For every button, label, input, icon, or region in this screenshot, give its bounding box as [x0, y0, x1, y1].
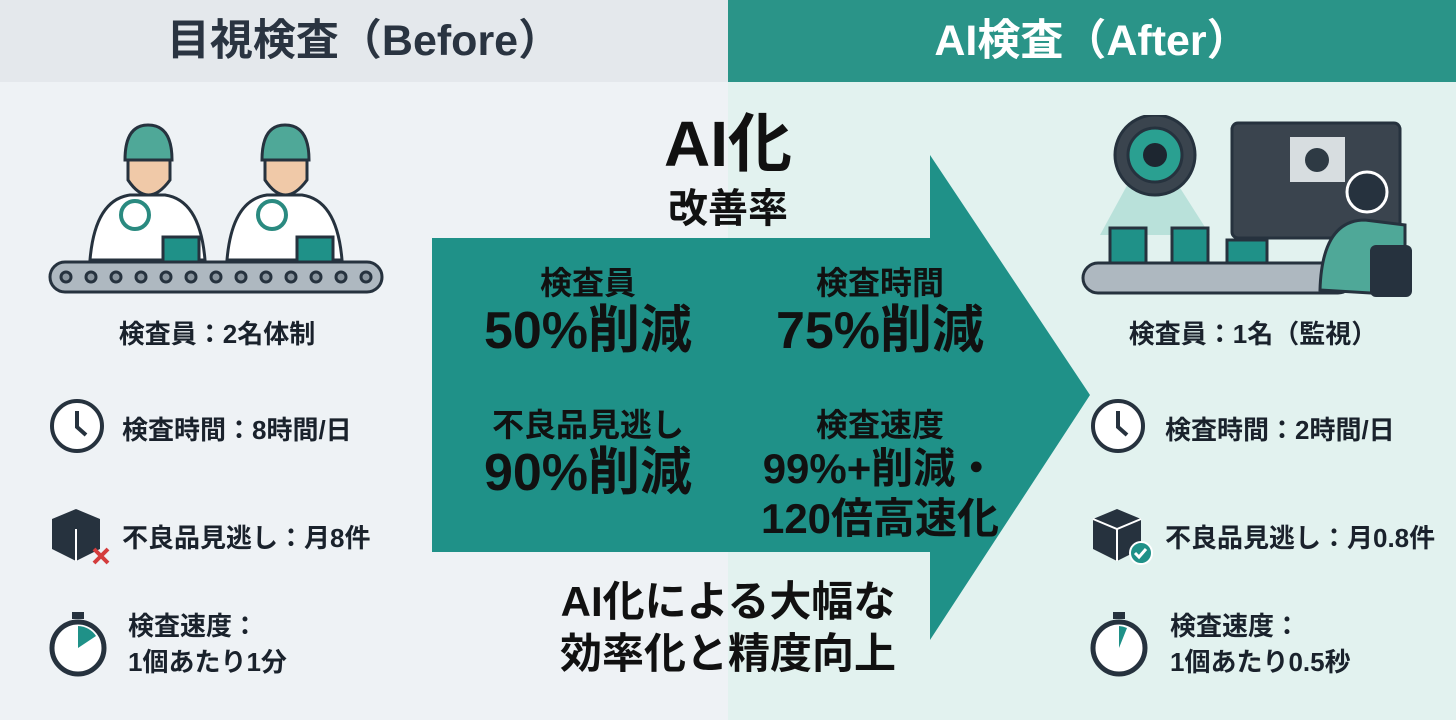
metric: 検査速度: 99%+削減・ — [763, 445, 997, 492]
metric: 検査速度: 120倍高速化 — [761, 495, 999, 542]
conclusion text: AI化による大幅な — [561, 578, 895, 625]
text: 検査速度 before: 検査速度： — [128, 611, 258, 641]
header: after — [728, 0, 1456, 82]
icon: clock left — [50, 399, 104, 453]
illustration: AI camera + monitor — [1082, 115, 1412, 297]
text: 不良品 after: 不良品見逃し：月0.8件 — [1165, 523, 1435, 553]
metric: 検査速度 — [761, 407, 999, 542]
conclusion text: 効率化と精度向上 — [560, 630, 896, 677]
metric: 不良品見逃し: 不良品見逃し — [492, 407, 684, 443]
label: 検査員 1名: 検査員：1名（監視） — [1129, 319, 1377, 349]
metric: 不良品見逃し: 90%削減 — [484, 444, 692, 502]
icon: clock right — [1091, 399, 1145, 453]
metric: 検査時間: 検査時間 — [816, 265, 944, 301]
header: after: AI検査（After） — [934, 17, 1250, 65]
header: before: 目視検査（Before） — [167, 17, 561, 65]
icon: stopwatch left — [50, 612, 106, 676]
text: 検査時間 after: 検査時間：2時間/日 — [1165, 415, 1395, 445]
metric: 検査員 — [484, 265, 692, 360]
text: 検査速度 before: 1個あたり1分 — [128, 647, 287, 677]
icon: stopwatch right — [1090, 612, 1148, 676]
background: left — [0, 82, 728, 720]
label: 検査員 2名: 検査員：2名体制 — [119, 319, 315, 349]
text: 検査速度 after: 検査速度： — [1170, 611, 1300, 641]
illustration: two inspectors on conveyor — [48, 124, 384, 294]
metric: 検査員: 50%削減 — [484, 302, 692, 360]
title: AI化: AI化 — [664, 108, 792, 180]
icon: box check — [1092, 509, 1153, 565]
background: right — [728, 82, 1456, 720]
text: 検査速度 after — [1170, 611, 1351, 677]
text: 検査時間 before: 検査時間：8時間/日 — [122, 415, 352, 445]
text: 検査速度 before — [128, 611, 287, 677]
icon: broken box — [52, 509, 110, 564]
subtitle: 改善率: 改善率 — [668, 187, 788, 231]
metric: 検査員: 検査員 — [540, 265, 636, 301]
metric: 不良品見逃し — [484, 407, 692, 502]
metric: 検査時間: 75%削減 — [776, 302, 984, 360]
text: 不良品 before: 不良品見逃し：月8件 — [122, 523, 370, 553]
header: before — [0, 0, 728, 82]
metric: 検査速度: 検査速度 — [816, 407, 944, 443]
metric: 検査時間 — [776, 265, 984, 360]
text: 検査速度 after: 1個あたり0.5秒 — [1170, 647, 1351, 677]
conclusion text — [560, 578, 896, 677]
